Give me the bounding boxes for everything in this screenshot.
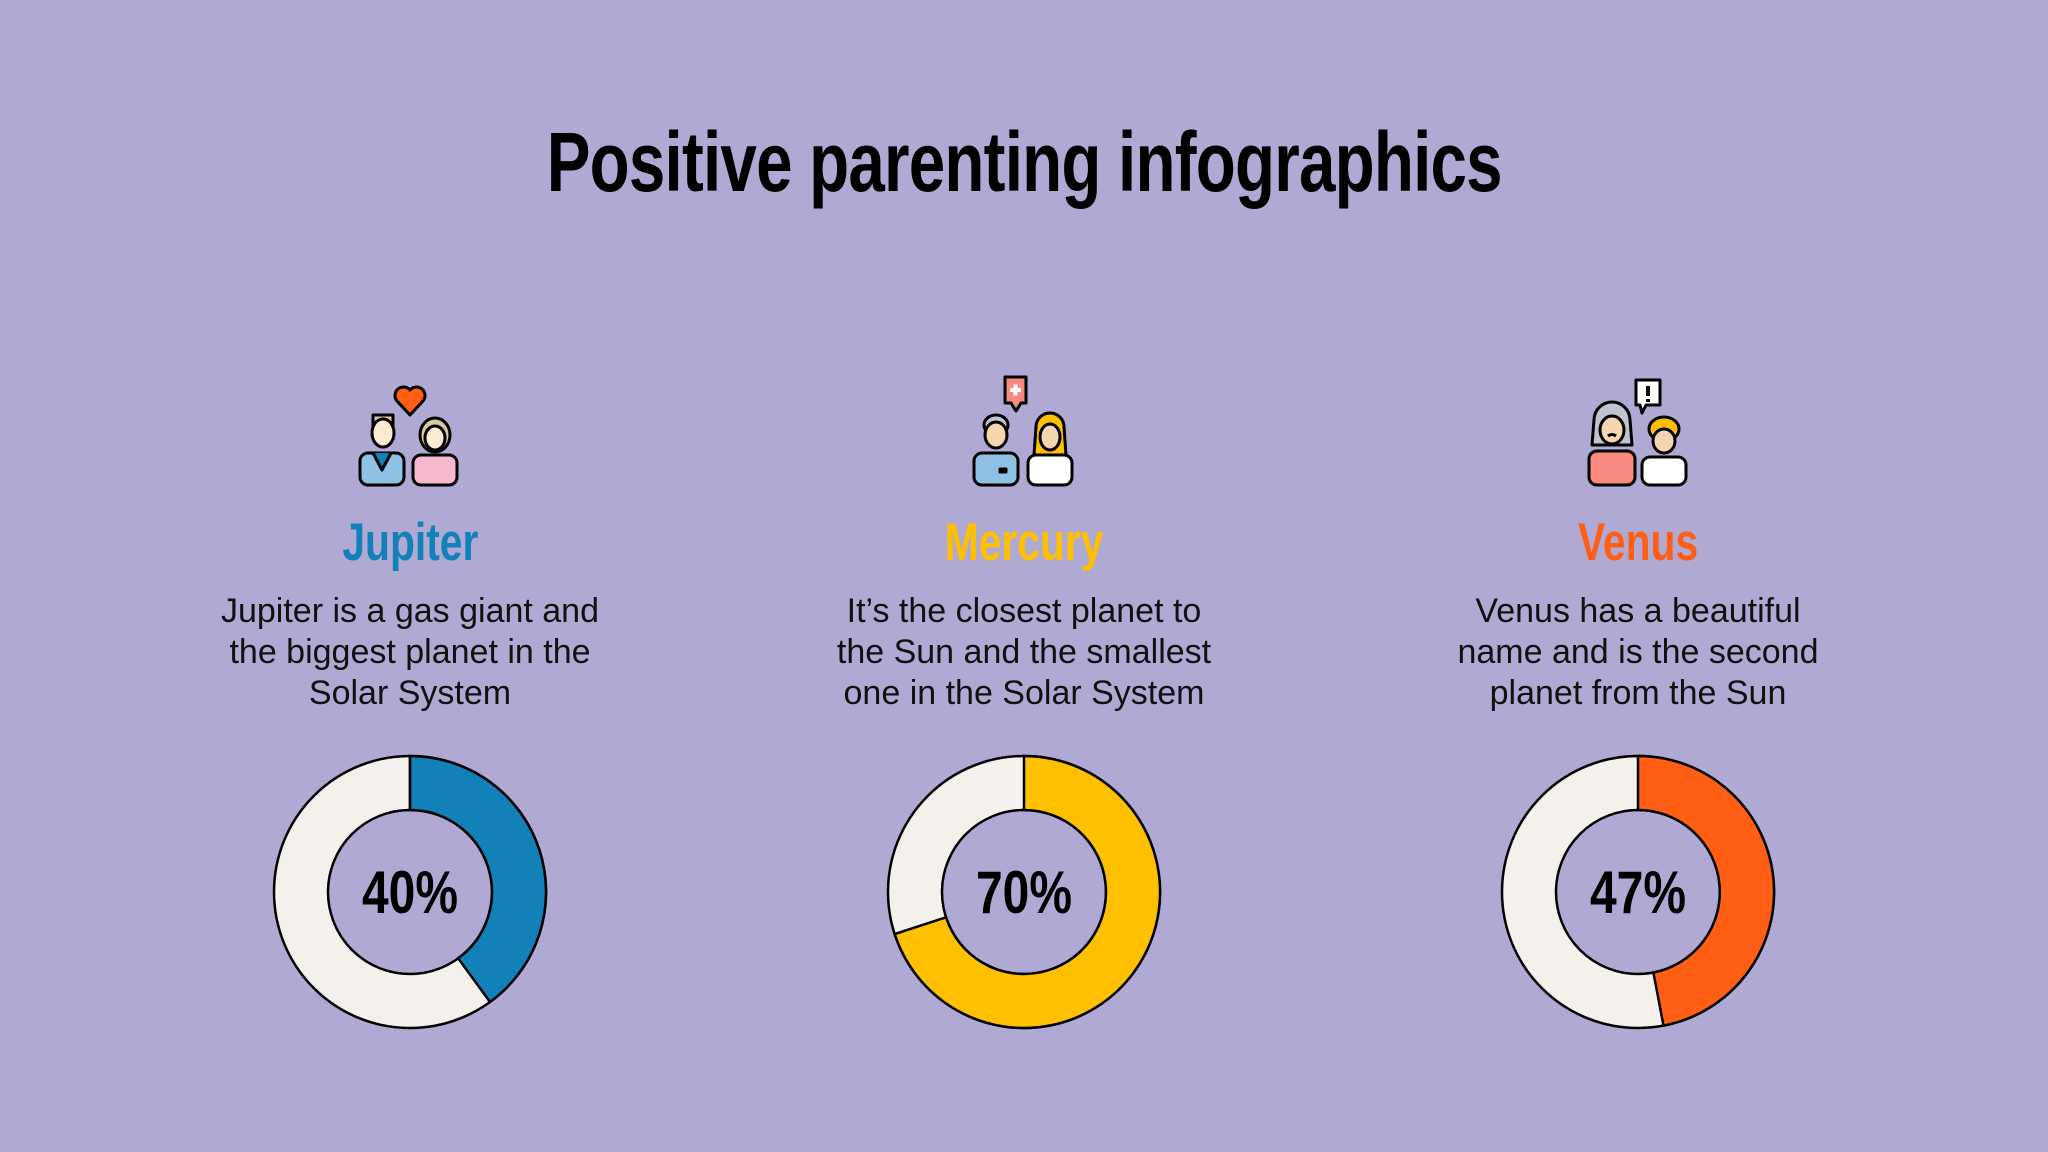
text: Jupiter description: Jupiter is a gas giant and [221, 592, 599, 630]
donut: Jupiter 40% [274, 756, 546, 1028]
heading: Jupiter: Jupiter [342, 513, 478, 572]
text: Mercury description [837, 592, 1211, 712]
text: Venus description: Venus has a beautiful [1475, 592, 1801, 630]
donut: Venus 47%: 47% [1590, 859, 1686, 926]
text: Venus description: name and is the second [1457, 633, 1819, 671]
donut: Mercury 70%: 70% [976, 859, 1072, 926]
icon: doctor couple [972, 376, 1074, 486]
text: Venus description: planet from the Sun [1490, 674, 1786, 712]
icon: grandmother and child [1588, 378, 1688, 486]
text: Jupiter description [221, 592, 599, 712]
text: Venus description [1457, 592, 1819, 712]
text: Jupiter description: the biggest planet in the [229, 633, 591, 671]
title: Positive parenting infographics [546, 115, 1502, 209]
icon: couple with heart [358, 386, 458, 486]
donut: Venus 47% [1502, 756, 1774, 1028]
heading: Venus: Venus [1578, 513, 1698, 572]
text: Mercury description: one in the Solar System [844, 674, 1204, 712]
text: Jupiter description: Solar System [309, 674, 511, 712]
text: Mercury description: the Sun and the smallest [837, 633, 1211, 671]
donut: Mercury 70% [888, 756, 1160, 1028]
text: Mercury description: It’s the closest planet to [847, 592, 1201, 630]
heading: Mercury: Mercury [945, 513, 1103, 572]
donut: Jupiter 40%: 40% [362, 859, 458, 926]
